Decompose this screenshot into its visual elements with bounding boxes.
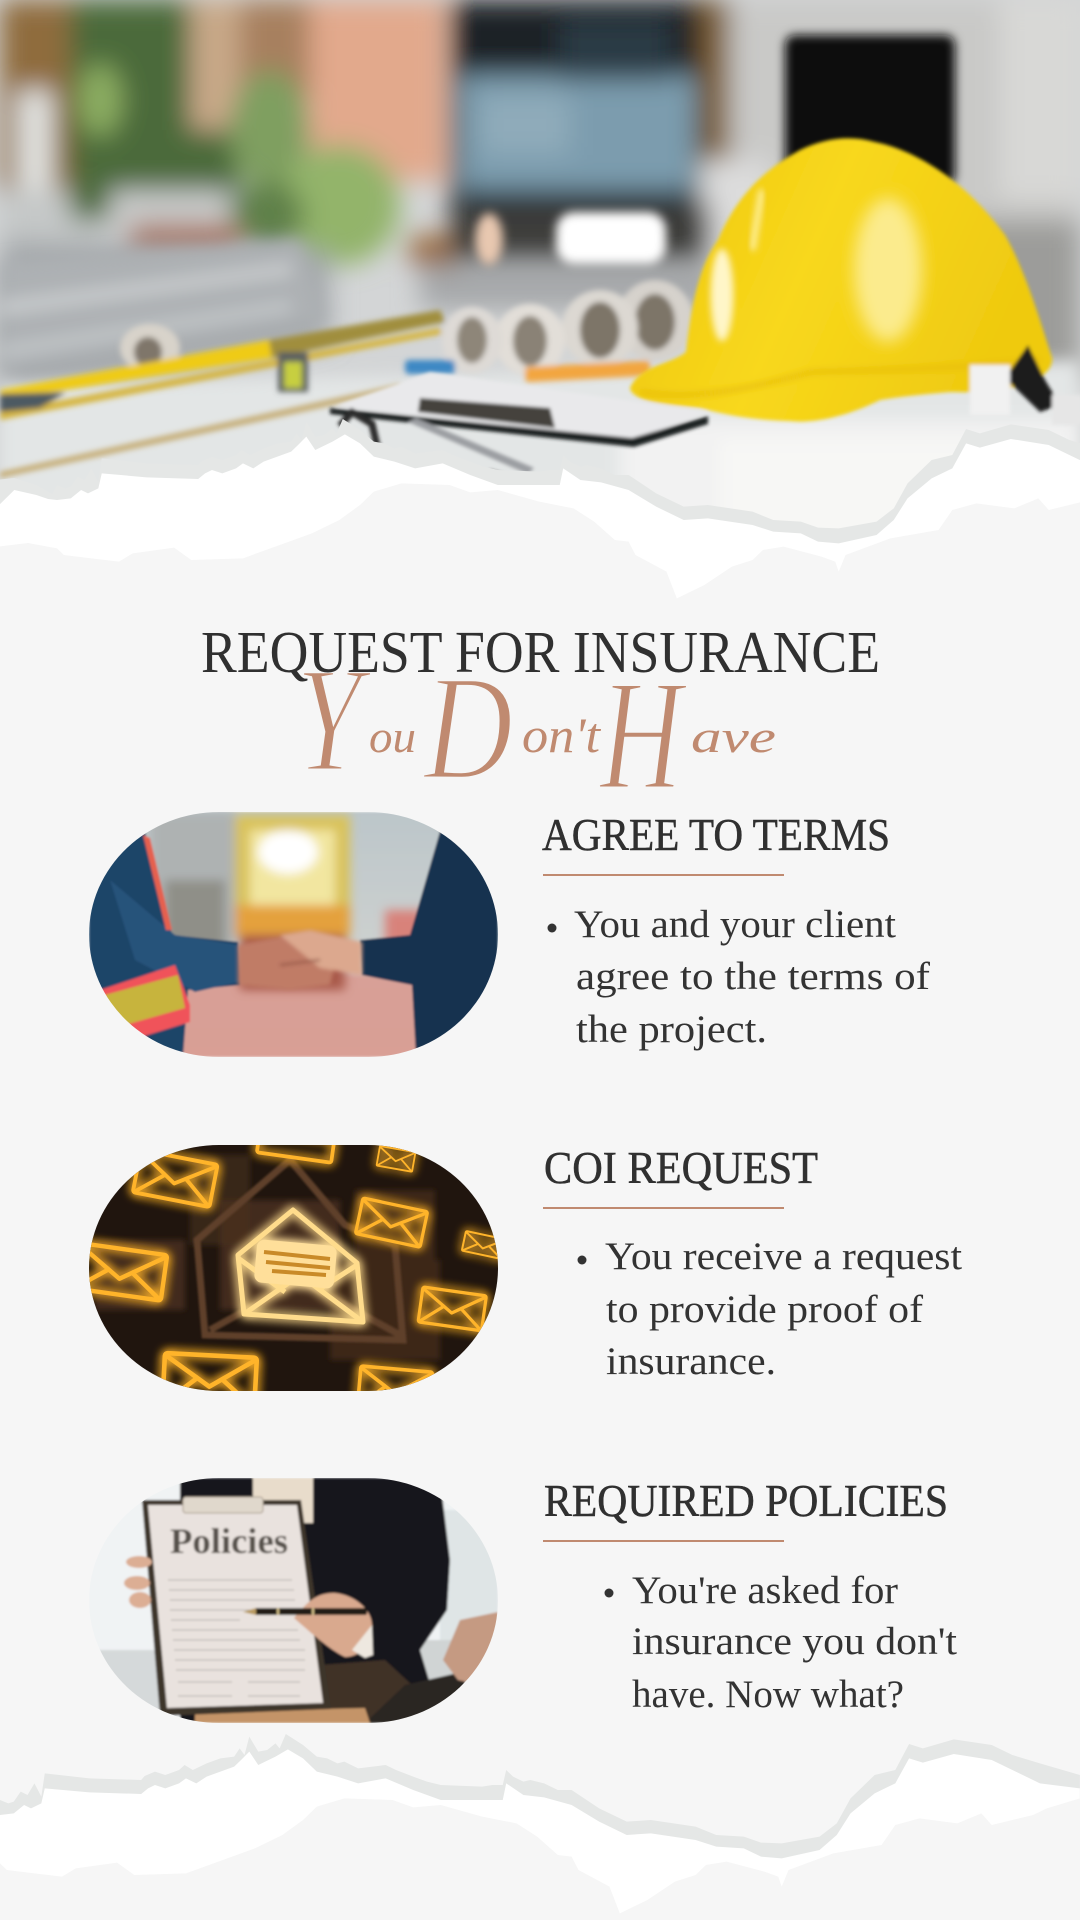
script subtitle: on't: [522, 707, 601, 763]
photo: handshake at construction site: [89, 812, 498, 1057]
pointing hand: [294, 1593, 372, 1657]
divider 1: [543, 874, 784, 876]
script subtitle: ave: [691, 711, 776, 762]
script subtitle: D: [422, 645, 513, 811]
agree to terms bullet text: You and your client: [574, 903, 896, 946]
divider 3: [543, 1540, 784, 1542]
clipboard board: [142, 1500, 331, 1716]
photo: clipboard with policies document: [89, 1478, 498, 1723]
agree to terms bullet text: agree to the terms of: [576, 955, 930, 998]
coi request bullet text: You receive a request: [605, 1235, 962, 1278]
script subtitle: Y: [296, 637, 372, 803]
skirt and legs: [320, 1660, 412, 1723]
coi request bullet text: to provide proof of: [606, 1288, 923, 1331]
title: [201, 619, 880, 822]
hero photo: hard hat and blueprints on a desk: [0, 0, 1080, 494]
photo: glowing envelopes: [89, 1145, 498, 1391]
shaking hands: [238, 930, 362, 990]
divider 2: [543, 1207, 784, 1209]
agree to terms bullet text: [548, 903, 930, 1051]
required policies bullet text: You're asked for: [632, 1569, 898, 1612]
hard hat: [630, 138, 1052, 422]
left fingers: [124, 1556, 152, 1608]
clip: [183, 1497, 263, 1513]
cuff: [352, 1625, 373, 1658]
blueprint rolls: [442, 280, 693, 376]
black strap: [1005, 345, 1060, 412]
bottom torn paper edge: [0, 1734, 1080, 1920]
top torn paper edge: [0, 419, 1080, 618]
coi request bullet text: [578, 1235, 962, 1383]
script subtitle: ou: [369, 711, 416, 762]
script subtitle: H: [598, 647, 688, 822]
coi request bullet text: insurance.: [606, 1340, 776, 1383]
right-side hand: [443, 1612, 498, 1685]
script subtitle: [296, 637, 776, 822]
note lines: [264, 1252, 330, 1275]
required policies bullet text: have. Now what?: [632, 1673, 904, 1716]
pen and coil: [408, 418, 534, 474]
main open envelope: [238, 1210, 363, 1322]
required policies heading: REQUIRED POLICIES: [544, 1476, 948, 1526]
coi request heading: COI REQUEST: [544, 1143, 818, 1193]
required policies bullet text: [604, 1569, 957, 1716]
Policies word: Policies: [170, 1521, 288, 1561]
pen: [243, 1608, 367, 1615]
dark suit: [180, 1478, 450, 1723]
right worker: [360, 828, 498, 1057]
small envelopes: [89, 1145, 498, 1391]
rolled plan end: [120, 324, 180, 372]
left worker: [89, 812, 240, 1057]
clipboard: [335, 372, 708, 440]
heading: request for insurance: REQUEST FOR INSURANCE: [201, 619, 880, 685]
agree to terms heading: AGREE TO TERMS: [542, 810, 890, 860]
clipboard paper: [148, 1505, 323, 1708]
ghost envelope: [197, 1160, 403, 1340]
document small text: [168, 1580, 305, 1696]
required policies bullet text: insurance you don't: [632, 1620, 957, 1663]
agree to terms bullet text: the project.: [576, 1008, 767, 1051]
